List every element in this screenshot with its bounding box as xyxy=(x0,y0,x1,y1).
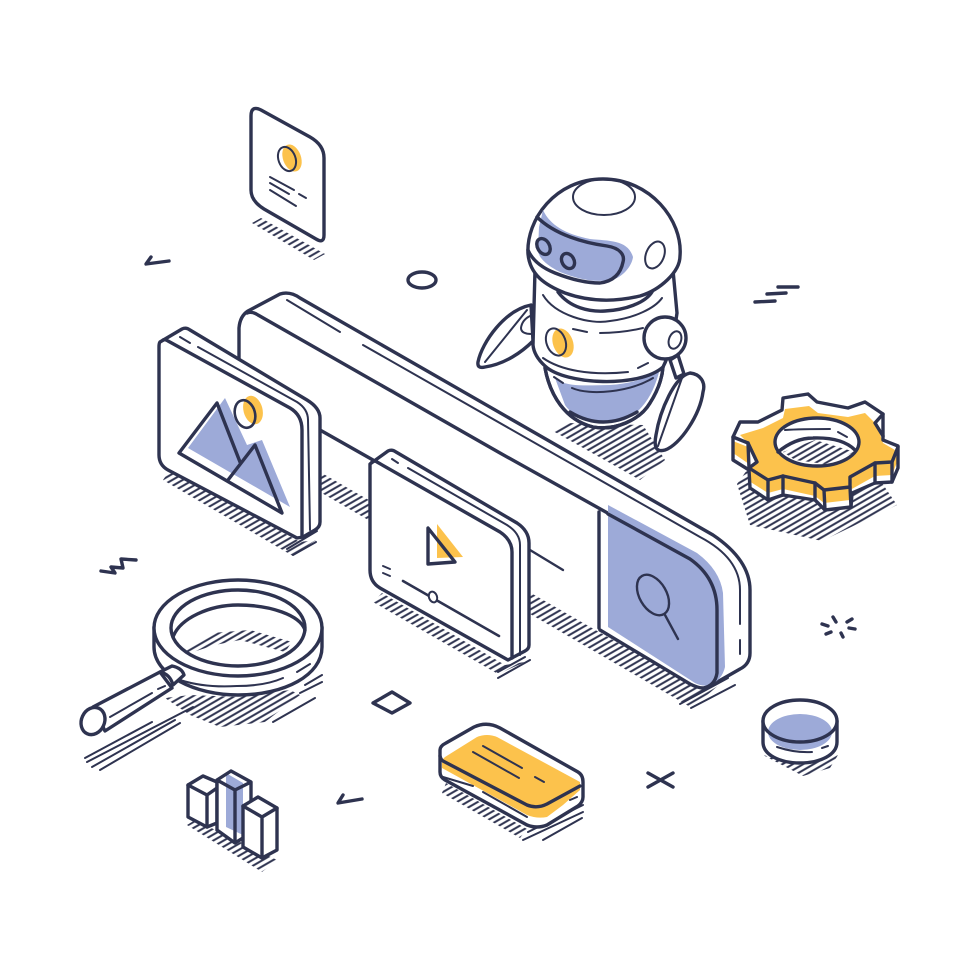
bar left xyxy=(188,776,217,827)
icon: yellow pill xyxy=(440,724,583,827)
video panel shadow xyxy=(373,593,530,678)
robot right arm xyxy=(644,317,704,451)
robot bowl xyxy=(545,367,663,428)
icon: gear xyxy=(733,394,898,510)
gear yellow sides xyxy=(733,441,898,503)
gear outlines xyxy=(733,394,898,510)
gear shadow xyxy=(737,470,897,541)
robot neck xyxy=(543,292,662,322)
illustration: robot xyxy=(478,179,704,451)
icon: magnifying glass xyxy=(77,580,322,739)
magnifier handle xyxy=(77,666,184,739)
image panel shadow xyxy=(163,470,317,556)
decoration: diamond xyxy=(373,692,410,713)
mountain picture xyxy=(179,394,290,513)
robot floor shadow xyxy=(553,423,665,480)
gear silhouette xyxy=(733,394,898,510)
icon: coin shadow xyxy=(763,755,838,776)
bar right xyxy=(243,797,277,858)
robot head xyxy=(528,179,680,300)
play button xyxy=(428,524,463,564)
robot left arm xyxy=(478,305,533,367)
robot body xyxy=(533,270,677,382)
icon: bar chart xyxy=(188,771,277,858)
gear yellow top xyxy=(740,406,895,490)
search bar shadow xyxy=(320,472,735,708)
decoration: bottom arrow xyxy=(338,795,362,803)
icon: magnifying glass shadow xyxy=(85,675,322,770)
bar middle xyxy=(217,771,251,843)
icon: document card xyxy=(251,108,325,260)
panel: image card xyxy=(159,328,320,538)
search button xyxy=(599,505,725,688)
panel: search bar xyxy=(239,293,750,689)
decoration: ring xyxy=(408,272,436,288)
progress bar xyxy=(403,581,499,636)
decoration: zigzag xyxy=(101,559,136,573)
decoration: triple dashes xyxy=(755,287,798,302)
icon: coin xyxy=(763,700,837,763)
panel: video card xyxy=(370,450,529,660)
decoration: sparks xyxy=(822,617,855,637)
decoration: cross xyxy=(648,773,673,787)
bar chart shadow xyxy=(187,820,277,872)
decoration: top-left arrow xyxy=(146,257,169,264)
yellow pill shadow xyxy=(442,783,583,840)
